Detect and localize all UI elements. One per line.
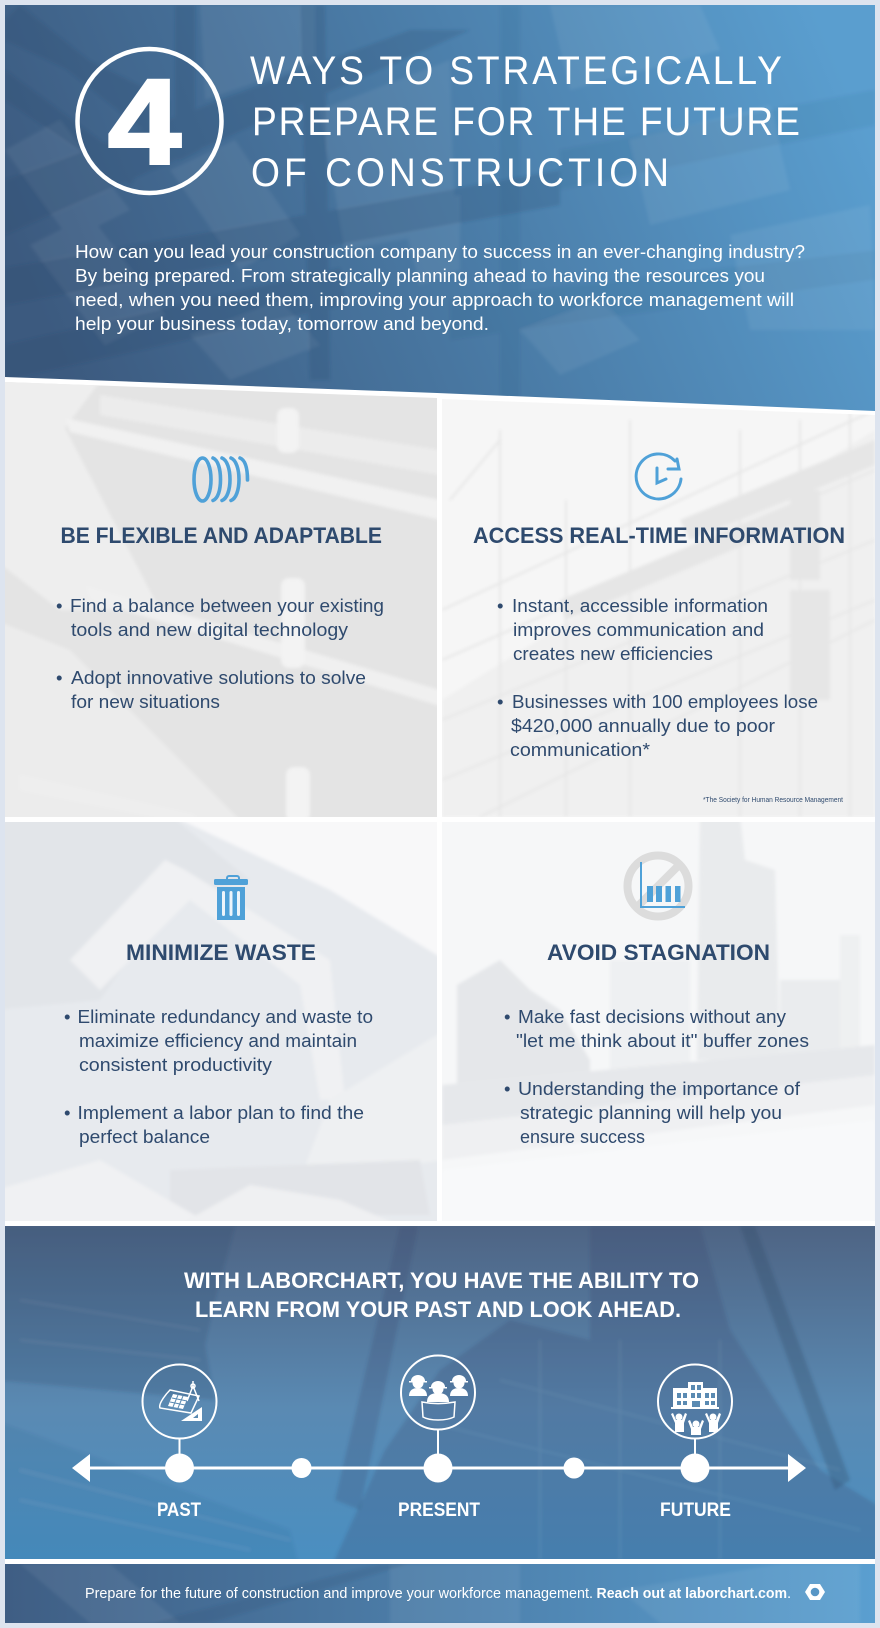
panel: avoid stagnation xyxy=(442,822,875,1170)
title xyxy=(250,49,800,195)
intro paragraph: help your business today, tomorrow and beyond. xyxy=(75,313,489,334)
title: PREPARE FOR THE FUTURE xyxy=(252,100,800,144)
icon: past blueprint xyxy=(142,1364,216,1438)
bullet list: • xyxy=(56,595,62,616)
panel photo background xyxy=(442,395,875,820)
panel photo background xyxy=(0,815,445,1230)
icon: no-growth chart xyxy=(628,856,688,916)
heading: AVOID STAGNATION xyxy=(547,940,770,965)
bullet list: • xyxy=(504,1078,510,1099)
title: OF CONSTRUCTION xyxy=(251,151,669,195)
banner heading: LEARN FROM YOUR PAST AND LOOK AHEAD. xyxy=(195,1297,681,1322)
bullet list: Implement a labor plan to find the xyxy=(78,1102,364,1123)
panel: access real-time information xyxy=(442,395,875,820)
bullet list: tools and new digital technology xyxy=(71,619,349,640)
footer photo background xyxy=(5,1564,875,1623)
timeline labels: FUTURE xyxy=(660,1500,731,1521)
panel: hero header xyxy=(5,5,875,415)
bullet list: maximize efficiency and maintain xyxy=(79,1030,357,1051)
bullet list: Businesses with 100 employees lose xyxy=(512,691,818,712)
bullet list xyxy=(497,595,818,760)
footer link: Reach out at laborchart.com xyxy=(596,1585,787,1602)
bullet list xyxy=(64,1006,373,1147)
bullet list: perfect balance xyxy=(79,1126,210,1147)
icon: future building with people xyxy=(658,1364,732,1438)
icon: present workers with plan xyxy=(401,1356,475,1430)
banner heading xyxy=(184,1268,699,1322)
bullet list: communication* xyxy=(510,739,650,760)
icon: trash can xyxy=(214,875,248,920)
bullet list: • xyxy=(64,1102,70,1123)
bullet list: Adopt innovative solutions to solve xyxy=(71,667,366,688)
bullet list: ensure success xyxy=(520,1126,645,1147)
intro paragraph: By being prepared. From strategically planning ahead to having the resources you xyxy=(75,265,765,286)
heading: BE FLEXIBLE AND ADAPTABLE xyxy=(60,523,382,548)
heading: MINIMIZE WASTE xyxy=(126,940,316,965)
bullet list: creates new efficiencies xyxy=(513,643,713,664)
bullet list: Find a balance between your existing xyxy=(70,595,384,616)
panel: be flexible and adaptable xyxy=(0,375,440,830)
bullet list: Understanding the importance of xyxy=(518,1078,801,1099)
banner photo background xyxy=(0,1226,880,1570)
bullet list: consistent productivity xyxy=(79,1054,273,1075)
timeline axis with arrows and dots xyxy=(72,1430,806,1482)
title: WAYS TO STRATEGICALLY xyxy=(250,49,782,93)
bullet list: improves communication and xyxy=(513,619,764,640)
bullet list: $420,000 annually due to poor xyxy=(511,715,775,736)
bullet list: for new situations xyxy=(71,691,220,712)
footnote: *The Society for Human Resource Management xyxy=(703,795,844,804)
bullet list: Instant, accessible information xyxy=(512,595,768,616)
white sheet behind the panels xyxy=(5,370,875,1567)
badge: number 4 in circle xyxy=(78,49,222,193)
bullet list xyxy=(56,595,384,712)
heading: ACCESS REAL-TIME INFORMATION xyxy=(473,523,845,548)
footer period: . xyxy=(787,1585,791,1602)
footer text: Prepare for the future of construction and improve your workforce management. xyxy=(85,1585,593,1602)
icon: coil spring xyxy=(194,458,248,501)
panel photo background xyxy=(442,822,875,1170)
bullet list: • xyxy=(504,1006,510,1027)
bullet list: • xyxy=(64,1006,70,1027)
bullet list: "let me think about it" buffer zones xyxy=(516,1030,809,1051)
intro paragraph: How can you lead your construction company to success in an ever-changing industry? xyxy=(75,241,805,262)
bullet list: Eliminate redundancy and waste to xyxy=(78,1006,373,1027)
bullet list: strategic planning will help you xyxy=(520,1102,782,1123)
bullet list: Make fast decisions without any xyxy=(518,1006,787,1027)
banner heading: WITH LABORCHART, YOU HAVE THE ABILITY TO xyxy=(184,1268,699,1293)
intro paragraph: need, when you need them, improving your approach to workforce management will xyxy=(75,289,794,310)
panel: minimize waste xyxy=(0,815,445,1230)
timeline labels: PAST xyxy=(157,1500,201,1521)
intro paragraph xyxy=(75,241,805,334)
bullet list: • xyxy=(56,667,62,688)
panel: footer call to action xyxy=(5,1564,875,1623)
badge: number 4 in circle: 4 xyxy=(108,54,181,190)
bullet list xyxy=(504,1006,809,1147)
icon: clock with arrow xyxy=(636,454,681,499)
panel: laborchart timeline banner xyxy=(0,1226,880,1570)
bullet list: • xyxy=(497,595,503,616)
bullet list: • xyxy=(497,691,503,712)
panel photo background xyxy=(0,375,440,830)
timeline labels xyxy=(157,1500,731,1521)
icon: laborchart hexagon logo xyxy=(805,1584,825,1600)
hero background photo xyxy=(5,5,875,415)
timeline labels: PRESENT xyxy=(398,1500,480,1521)
